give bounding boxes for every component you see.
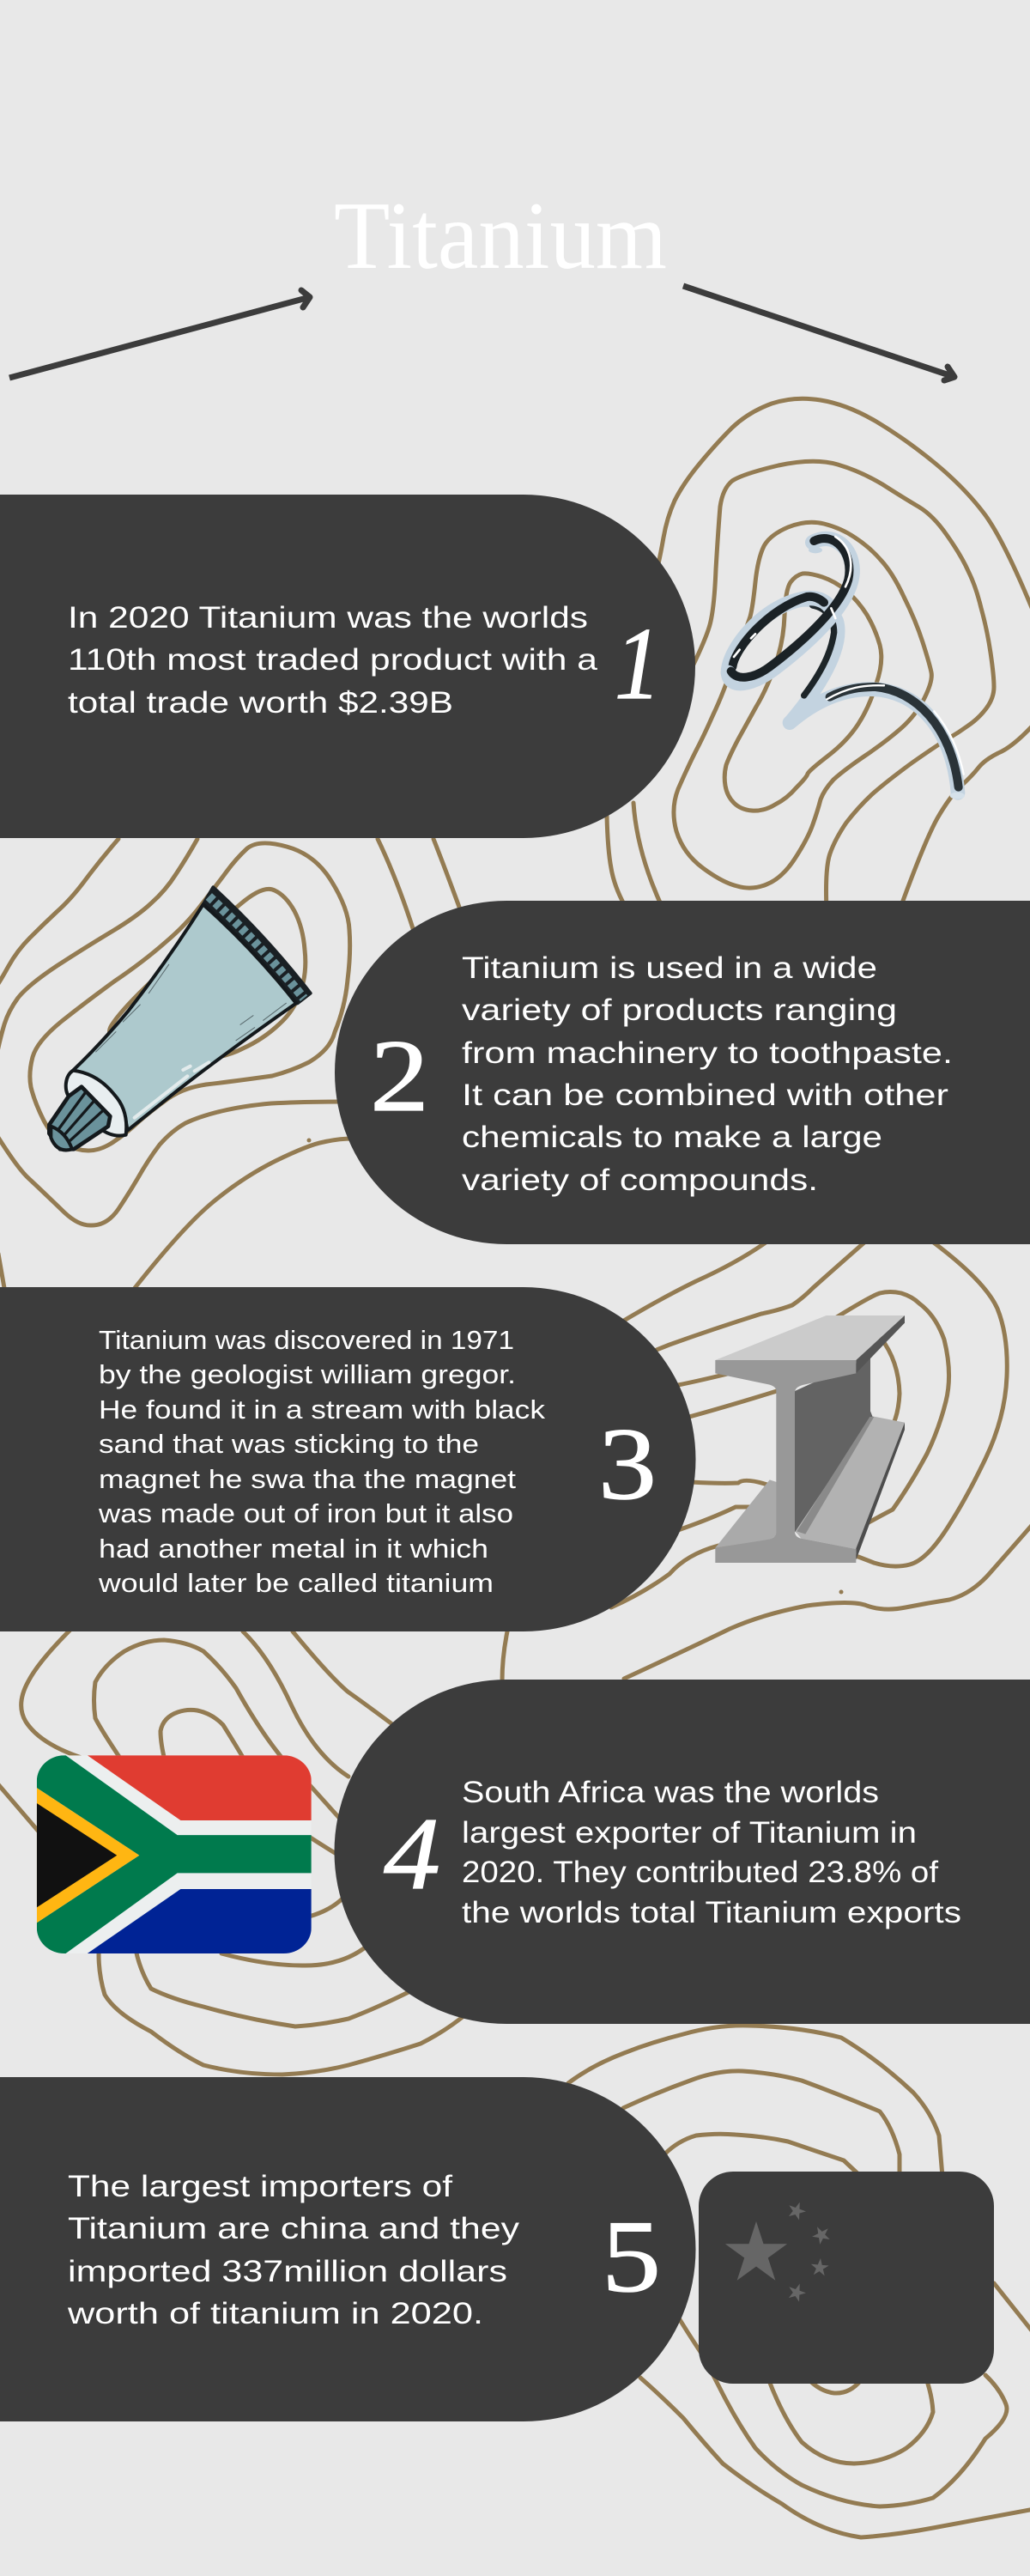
number 5: 5 (602, 2199, 661, 2313)
panel 4 text: the worlds total Titanium exports (462, 1896, 961, 1929)
panel 2 text: Titanium is used in a wide (462, 951, 877, 985)
panel 4 (334, 1680, 1030, 2024)
panel 4 text (462, 1776, 961, 1929)
icon: chrome spiral (728, 537, 965, 799)
panel 3 text: sand that was sticking to the (99, 1429, 479, 1459)
panel 5 text (67, 2170, 520, 2330)
contour lines: top right (607, 398, 1030, 910)
panel 3 text: was made out of iron but it also (98, 1498, 513, 1528)
arrow: right, pointing down right (683, 286, 954, 380)
number 1: 1 (615, 606, 661, 720)
icon: South Africa flag (37, 1755, 312, 1953)
panel 2 text: chemicals to make a large (462, 1121, 882, 1154)
panel 2 text (462, 951, 953, 1197)
arrow: left, pointing up right (9, 290, 310, 378)
number 4: 4 (384, 1796, 440, 1911)
panel 2 text: variety of products ranging (462, 993, 897, 1027)
panel 2 (335, 901, 1030, 1244)
panel 3 text: by the geologist william gregor. (99, 1359, 516, 1389)
panel 3 text: had another metal in it which (99, 1534, 488, 1564)
panel 1 text: 110th most traded product with a (68, 643, 598, 677)
contour lines: right of panel 3 (611, 1236, 1030, 1679)
panel 2 text: It can be combined with other (462, 1078, 948, 1112)
contour lines: around panel 5 (568, 2026, 1030, 2537)
contour lines: left of panel 4 (0, 1630, 507, 2075)
panel 2 text: from machinery to toothpaste. (462, 1036, 953, 1070)
panel 5 (0, 2077, 695, 2421)
panel 2 text: variety of compounds. (462, 1163, 818, 1197)
panel 1 (0, 495, 695, 838)
icon: China flag (699, 2172, 994, 2384)
icon: steel I-beam (715, 1315, 905, 1563)
number 3: 3 (598, 1406, 657, 1521)
panel 3 text (98, 1325, 546, 1598)
panel 5 text: Titanium are china and they (68, 2212, 520, 2245)
panel 3 text: Titanium was discovered in 1971 (99, 1325, 514, 1355)
panel 5 text: The largest importers of (68, 2170, 452, 2203)
panel 3 text: would later be called titanium (98, 1568, 494, 1598)
panel 5 text: imported 337million dollars (68, 2255, 507, 2288)
panel 3 (0, 1287, 695, 1631)
title: Titanium (334, 183, 667, 289)
panel 4 text: South Africa was the worlds (462, 1776, 879, 1809)
panel 4 text: 2020. They contributed 23.8% of (462, 1856, 938, 1889)
panel 1 text (68, 601, 598, 720)
icon: toothpaste tube (49, 887, 311, 1150)
panel 3 text: He found it in a stream with black (99, 1394, 546, 1425)
number 2: 2 (370, 1018, 429, 1133)
contour lines: left of panel 2 (0, 839, 464, 1288)
panel 3 text: magnet he swa tha the magnet (99, 1464, 516, 1494)
panel 1 text: total trade worth $2.39B (68, 686, 453, 720)
panel 5 text: worth of titanium in 2020. (67, 2297, 483, 2330)
panel 1 text: In 2020 Titanium was the worlds (68, 601, 588, 635)
panel 4 text: largest exporter of Titanium in (462, 1816, 917, 1850)
